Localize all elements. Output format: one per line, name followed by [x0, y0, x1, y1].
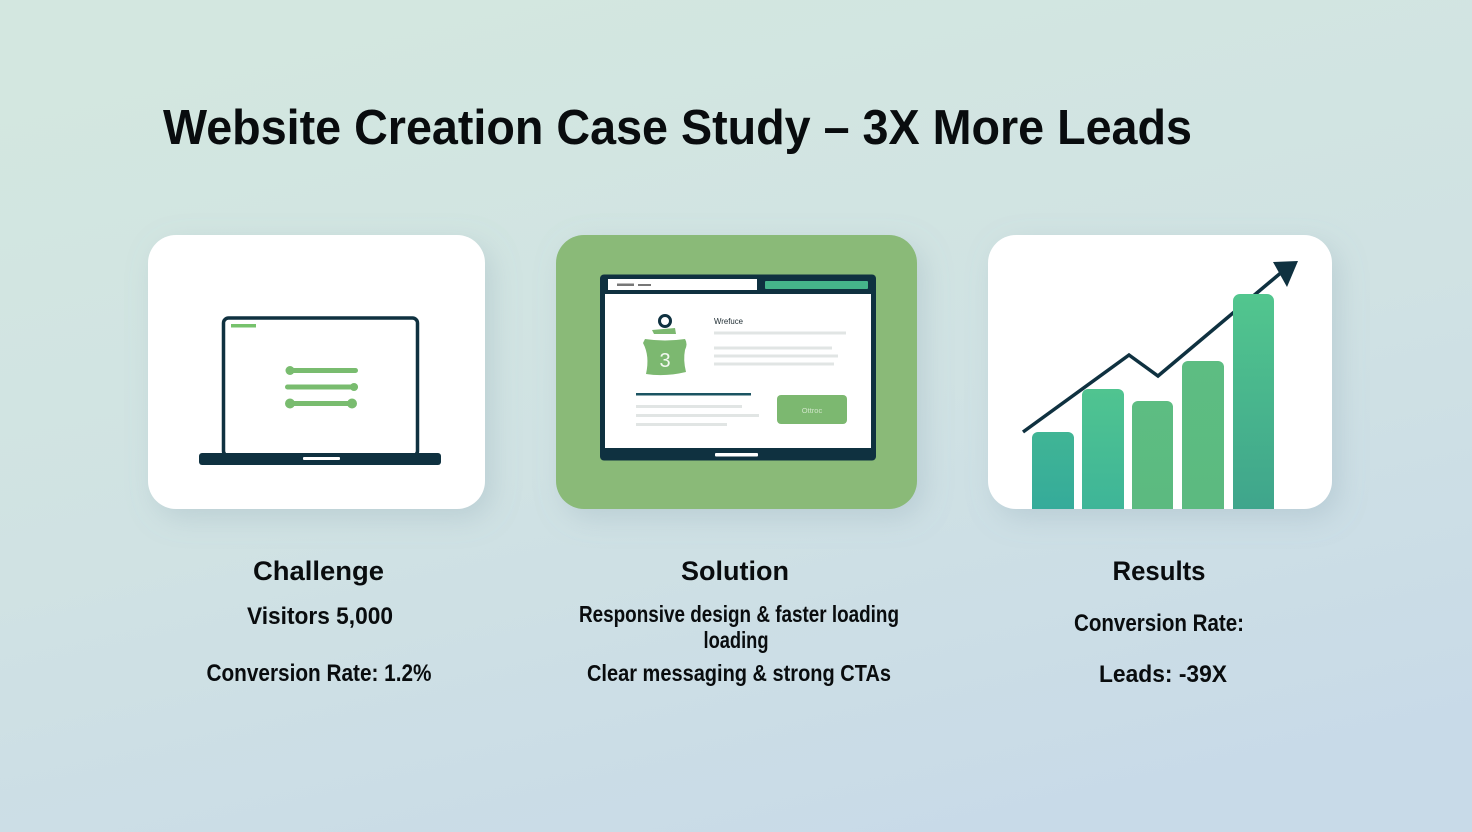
text block: challenge — [206, 556, 432, 687]
text block: solution — [579, 556, 899, 686]
button — [777, 395, 847, 424]
icon: laptop — [199, 318, 441, 465]
arrow: growth trend — [1023, 261, 1298, 432]
panel: challenge card — [148, 235, 485, 509]
text block: challenge: Conversion Rate: 1.2% — [206, 660, 432, 687]
text block: solution: Clear messaging & strong CTAs — [587, 660, 891, 686]
text block: results: Conversion Rate: — [1074, 610, 1244, 637]
icon: website on monitor — [600, 274, 876, 460]
heading: solution: Solution — [681, 556, 789, 586]
text block: solution: Responsive design & faster loading — [579, 601, 899, 627]
text block: results: Leads: -39X — [1099, 661, 1227, 688]
panel: results card — [988, 235, 1332, 509]
text block: solution: loading — [704, 627, 768, 653]
button: Ottroc — [802, 406, 822, 415]
heading: challenge: Challenge — [253, 556, 384, 586]
heading: results: Results — [1112, 556, 1206, 586]
title: Website Creation Case Study – 3X More Leads — [163, 101, 1192, 155]
text block: challenge: Visitors 5,000 — [247, 603, 393, 630]
icon: website on monitor: 3 — [659, 350, 671, 372]
chart: rising bars with arrow — [1023, 261, 1298, 509]
icon: website on monitor: Wrefuce — [714, 317, 744, 326]
panel: solution card — [556, 235, 917, 509]
text block: results — [1074, 556, 1244, 688]
